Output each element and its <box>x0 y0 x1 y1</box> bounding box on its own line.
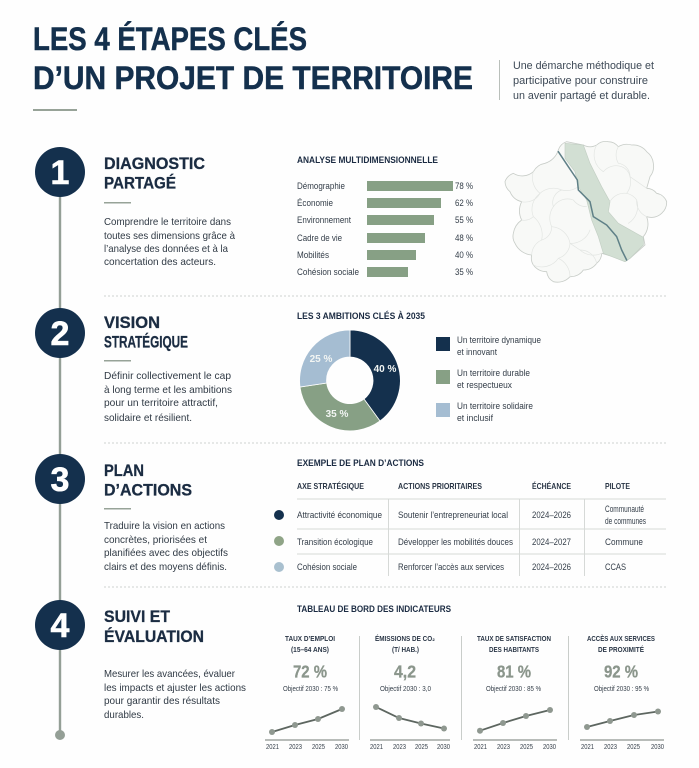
indicator: taux d'emploi: 2030 <box>335 744 348 751</box>
step 4 number badge <box>35 600 85 650</box>
title <box>33 20 473 96</box>
indicator: émissions de CO2: 2025 <box>415 744 428 751</box>
subtitle: Une démarche méthodique et <box>513 60 654 72</box>
panel: step 2 vision <box>35 308 541 431</box>
action plan table: 2024–2027 <box>532 537 571 547</box>
indicator: taux d'emploi: TAUX D’EMPLOI <box>285 634 335 643</box>
step 2 heading: STRATÉGIQUE <box>104 332 188 352</box>
donut legend: et inclusif <box>457 413 493 423</box>
indicator: taux de satisfaction: DES HABITANTS <box>489 645 539 654</box>
indicator: accès aux services: 2030 <box>651 744 664 751</box>
donut legend: Un territoire dynamique <box>457 335 541 345</box>
subtitle <box>513 60 654 102</box>
bar chart: analyse multidimensionnelle: 48 % <box>455 233 473 243</box>
indicator: taux de satisfaction <box>473 634 557 751</box>
step 3 description: planifiées avec des objectifs <box>104 547 228 559</box>
step 3 heading: D’ACTIONS <box>104 482 192 500</box>
step 2 description: solidaire et résilient. <box>104 412 192 424</box>
step 4 description: les impacts et ajuster les actions <box>104 682 246 694</box>
donut legend: et innovant <box>457 347 497 357</box>
indicator: émissions de CO2: 2030 <box>437 744 450 751</box>
indicator: taux d'emploi: Objectif 2030 : 75 % <box>283 684 338 693</box>
step 4 description <box>104 668 246 721</box>
action plan table: de communes <box>605 516 646 526</box>
action plan table: CCAS <box>605 562 626 572</box>
step 1 description <box>104 216 235 268</box>
action plan table: 2024–2026 <box>532 510 571 520</box>
indicator: taux de satisfaction: 2025 <box>520 744 533 751</box>
indicator: accès aux services: DE PROXIMITÉ <box>598 645 644 654</box>
action plan table: EXEMPLE DE PLAN D’ACTIONS <box>297 458 424 469</box>
step 3 description: clairs et des moyens définis. <box>104 561 227 573</box>
indicator: accès aux services: 2023 <box>604 744 617 751</box>
panel: step 1 diagnostic <box>35 141 667 282</box>
indicator: taux d'emploi <box>265 634 349 751</box>
step 1 description: concertation des acteurs. <box>104 256 216 268</box>
action plan table: Soutenir l’entrepreneuriat local <box>398 510 508 520</box>
panel: step 3 plan <box>35 454 666 576</box>
donut chart heading: LES 3 AMBITIONS CLÉS À 2035 <box>297 311 426 322</box>
timeline line <box>55 172 65 740</box>
indicator: taux d'emploi: 2021 <box>266 744 279 751</box>
bar chart: analyse multidimensionnelle: 55 % <box>455 215 473 225</box>
action plan table: AXE STRATÉGIQUE <box>297 481 364 491</box>
indicator: accès aux services: 92 % <box>604 662 638 682</box>
indicator: taux d'emploi: 2023 <box>289 744 302 751</box>
bar chart: analyse multidimensionnelle: ANALYSE MULTIDIMENSIONNELLE <box>297 155 438 166</box>
step 3 description <box>104 520 228 573</box>
donut legend <box>436 335 541 423</box>
step 1 description: Comprendre le territoire dans <box>104 216 231 228</box>
indicator: émissions de CO2: ÉMISSIONS DE CO₂ <box>375 634 435 643</box>
indicator: accès aux services: ACCÈS AUX SERVICES <box>587 634 655 643</box>
action plan table <box>274 458 666 576</box>
bar chart: analyse multidimensionnelle: Économie <box>297 198 333 208</box>
territory map <box>505 141 667 282</box>
indicator: taux de satisfaction: 2030 <box>543 744 556 751</box>
indicator: taux de satisfaction: 2021 <box>474 744 487 751</box>
bar chart: analyse multidimensionnelle: 78 % <box>455 181 473 191</box>
indicator: émissions de CO2: 2021 <box>370 744 383 751</box>
bar chart: analyse multidimensionnelle: 40 % <box>455 250 473 260</box>
indicator: émissions de CO2: 2023 <box>393 744 406 751</box>
bar chart: analyse multidimensionnelle: Cohésion sociale <box>297 267 359 277</box>
step 2 heading <box>104 314 188 352</box>
step 1 description: l’analyse des données et à la <box>104 243 228 255</box>
step 4 heading: ÉVALUATION <box>104 627 204 646</box>
indicator: accès aux services: 2021 <box>581 744 594 751</box>
step 2 heading: VISION <box>104 314 160 332</box>
indicator: taux d'emploi: (15–64 ANS) <box>291 645 329 654</box>
bar chart: analyse multidimensionnelle: 35 % <box>455 267 473 277</box>
donut chart: 35 % <box>326 409 349 420</box>
step 4 heading <box>104 608 204 646</box>
step 4 number badge: 4 <box>51 607 70 645</box>
bar chart: analyse multidimensionnelle: Environnement <box>297 215 351 225</box>
indicator: taux d'emploi: 2025 <box>312 744 325 751</box>
indicator: accès aux services <box>580 634 664 751</box>
indicator: émissions de CO2: Objectif 2030 : 3,0 <box>380 684 431 693</box>
action plan table: ACTIONS PRIORITAIRES <box>398 481 482 491</box>
donut chart <box>300 330 400 431</box>
step 2 description <box>104 370 232 424</box>
indicator: émissions de CO2: 4,2 <box>394 662 416 682</box>
subtitle: participative pour construire <box>513 75 648 87</box>
step 3 number badge <box>35 454 85 504</box>
step 3 number badge: 3 <box>51 461 69 499</box>
subtitle: un avenir partagé et durable. <box>513 90 650 102</box>
action plan table: Développer les mobilités douces <box>398 537 513 547</box>
step 4 heading: SUIVI ET <box>104 608 170 626</box>
action plan table: ÉCHÉANCE <box>532 481 571 491</box>
donut legend: Un territoire durable <box>457 368 530 378</box>
step 1 heading: PARTAGÉ <box>104 174 176 192</box>
indicator: accès aux services: Objectif 2030 : 95 % <box>594 684 649 693</box>
donut legend: Un territoire solidaire <box>457 401 533 411</box>
bar chart: analyse multidimensionnelle: 62 % <box>455 198 473 208</box>
step 1 number badge: 1 <box>51 154 69 192</box>
action plan table: Commune <box>605 537 643 547</box>
indicator: accès aux services: 2025 <box>627 744 640 751</box>
panel: step 4 suivi <box>35 600 664 751</box>
indicator: taux de satisfaction: 81 % <box>497 662 531 682</box>
step 1 description: toutes ses dimensions grâce à <box>104 230 235 242</box>
title: D’UN PROJET DE TERRITOIRE <box>33 60 473 96</box>
bar chart: analyse multidimensionnelle: Démographie <box>297 181 345 191</box>
indicator: émissions de CO2: (T/ HAB.) <box>392 645 419 654</box>
donut chart: 25 % <box>310 354 333 365</box>
step 1 number badge <box>35 147 85 197</box>
step 3 description: concrètes, priorisées et <box>104 534 207 546</box>
step 1 heading: DIAGNOSTIC <box>104 155 205 173</box>
step 3 heading: PLAN <box>104 462 144 480</box>
action plan table: 2024–2026 <box>532 562 571 572</box>
step 2 number badge <box>35 308 85 358</box>
title: LES 4 ÉTAPES CLÉS <box>33 20 307 57</box>
step 2 description: pour un territoire attractif, <box>104 397 218 409</box>
step 4 description: Mesurer les avancées, évaluer <box>104 668 235 680</box>
donut chart: 40 % <box>374 364 397 375</box>
bar chart: analyse multidimensionnelle: Mobilités <box>297 250 329 260</box>
step 2 number badge: 2 <box>51 315 69 353</box>
action plan table: PILOTE <box>605 481 630 491</box>
step 2 description: à long terme et les ambitions <box>104 384 232 396</box>
indicator: taux de satisfaction: TAUX DE SATISFACTION <box>477 634 551 643</box>
bar chart: analyse multidimensionnelle <box>297 155 473 277</box>
step 4 description: durables. <box>104 709 144 721</box>
action plan table: Transition écologique <box>297 537 373 547</box>
step 2 description: Définir collectivement le cap <box>104 370 231 382</box>
step 4 description: pour garantir des résultats <box>104 695 220 707</box>
indicator: taux de satisfaction: 2023 <box>497 744 510 751</box>
dashboard heading: TABLEAU DE BORD DES INDICATEURS <box>297 604 451 615</box>
action plan table: Cohésion sociale <box>297 562 357 572</box>
step 1 heading <box>104 155 205 192</box>
bar chart: analyse multidimensionnelle: Cadre de vie <box>297 233 342 243</box>
indicator: taux de satisfaction: Objectif 2030 : 85 % <box>486 684 541 693</box>
action plan table: Attractivité économique <box>297 510 382 520</box>
action plan table: Renforcer l’accès aux services <box>398 562 504 572</box>
step 3 heading <box>104 462 192 500</box>
indicator: émissions de CO2 <box>370 634 450 751</box>
action plan table: Communauté <box>605 504 644 514</box>
donut legend: et respectueux <box>457 380 512 390</box>
step 3 description: Traduire la vision en actions <box>104 520 225 532</box>
indicator: taux d'emploi: 72 % <box>293 662 327 682</box>
